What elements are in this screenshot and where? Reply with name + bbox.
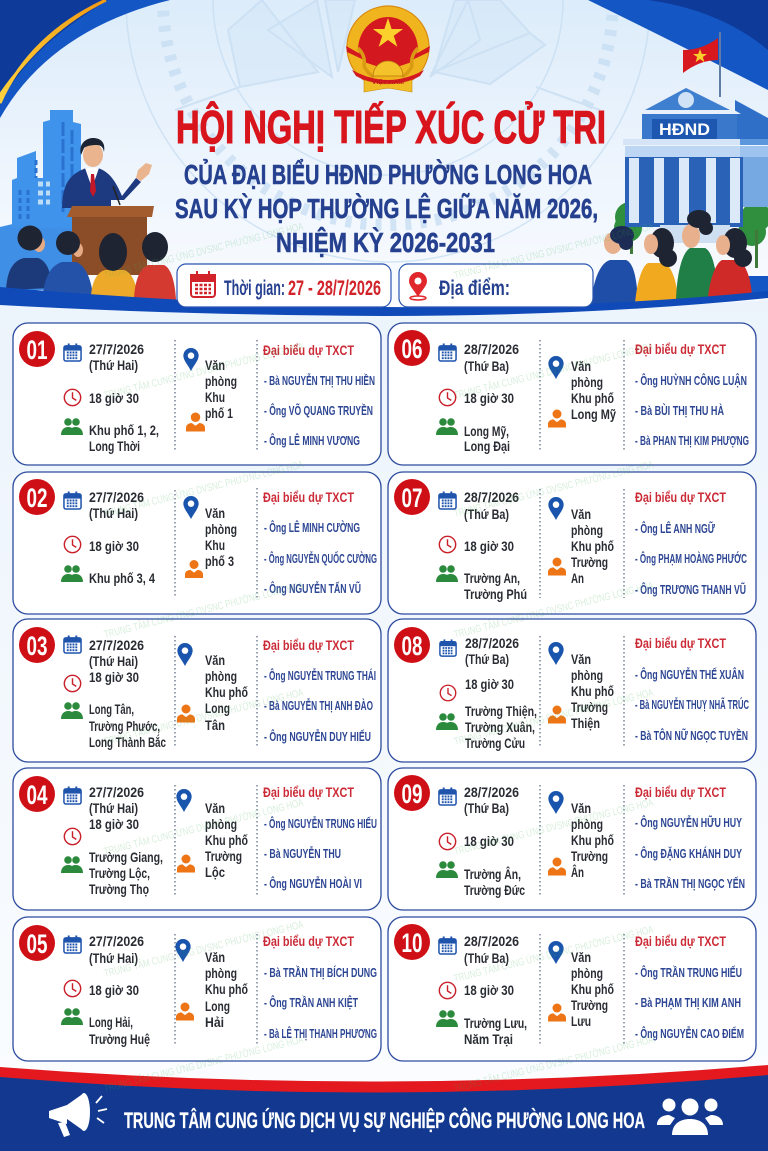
delegates — [635, 373, 749, 448]
number badge 06 — [394, 330, 430, 366]
area: Long Tân, — [89, 701, 134, 717]
venue: Văn — [571, 651, 591, 667]
date: (Thứ Ba) — [464, 800, 509, 816]
watermarks: TRUNG TÂM CUNG ỨNG DVSNC PHƯỜNG LONG HOA — [453, 686, 655, 748]
area: Long Mỹ, — [464, 423, 509, 439]
venue: Văn — [571, 800, 591, 816]
number badge 05 — [19, 925, 55, 961]
date: (Thứ Hai) — [89, 653, 138, 669]
area — [89, 849, 163, 897]
venue: phòng — [205, 373, 237, 389]
date: 27/7/2026 — [89, 489, 144, 505]
venue: phòng — [571, 374, 603, 390]
number badge 08: 08 — [402, 631, 422, 661]
delegates: - Ông VÕ QUANG TRUYỀN — [264, 403, 373, 418]
date: 27/7/2026 — [89, 637, 144, 653]
time value: 27 - 28/7/2026 — [288, 277, 381, 300]
area: Trường Lưu, — [464, 1015, 527, 1031]
icon: people — [61, 856, 83, 873]
number badge 10: 10 — [402, 928, 422, 958]
venue: Thiện — [571, 715, 600, 731]
icon: clock — [64, 389, 81, 406]
date: (Thứ Ba) — [464, 950, 509, 966]
date — [464, 933, 519, 966]
area: Trường Phú — [464, 586, 527, 602]
watermarks: TRUNG TÂM CUNG ỨNG DVSNC PHƯỜNG LONG HOA — [453, 579, 655, 641]
area: Trường Xuân, — [465, 719, 535, 735]
area: Long Thành Bắc — [89, 733, 166, 750]
venue: Lộc — [205, 864, 225, 880]
venue: phố 1 — [205, 405, 233, 421]
illustration: trees — [614, 202, 768, 268]
venue — [571, 506, 614, 586]
venue — [205, 357, 237, 421]
venue: Khu phố — [205, 684, 248, 700]
icon: people — [436, 565, 458, 582]
icon: clock — [64, 675, 81, 692]
delegates: - Bà NGUYỄN THU — [264, 846, 341, 861]
date: (Thứ Ba) — [464, 358, 509, 374]
icon: pin — [548, 356, 564, 379]
blue swoosh under header — [0, 287, 768, 316]
icon: pin — [548, 791, 564, 814]
date: (Thứ Hai) — [89, 357, 138, 373]
area — [464, 865, 525, 898]
icon: red pin — [409, 272, 427, 300]
icon: people — [436, 1010, 458, 1027]
watermarks: TRUNG TÂM CUNG ỨNG DVSNC PHƯỜNG LONG HOA — [453, 220, 655, 282]
card 04 — [13, 768, 381, 910]
venue: phòng — [571, 667, 603, 683]
illustration: HĐND building — [623, 82, 768, 243]
icon: clock — [64, 536, 81, 553]
watermarks — [103, 220, 655, 1095]
corner arcs and gold swoosh — [0, 0, 170, 118]
icon: people — [61, 565, 83, 582]
area: Trường Lộc, — [89, 865, 150, 881]
icon: people — [436, 418, 458, 435]
watermarks: TRUNG TÂM CUNG ỨNG DVSNC PHƯỜNG LONG HOA — [453, 340, 655, 402]
area: Trường Ân, — [464, 865, 521, 882]
icon: pin — [176, 789, 192, 812]
venue — [571, 651, 614, 731]
delegates — [264, 965, 377, 1041]
delegates: - Bà BÙI THỊ THU HÀ — [635, 403, 724, 418]
date — [89, 933, 144, 966]
card 02 — [13, 472, 381, 614]
date: 28/7/2026 — [464, 784, 519, 800]
venue: Khu phố — [205, 832, 248, 848]
icon: calendar — [440, 639, 456, 656]
number badge 01 — [19, 331, 55, 367]
date — [89, 784, 144, 816]
delegates: - Bà NGUYỄN THỊ ANH ĐÀO — [264, 698, 373, 713]
delegates — [264, 668, 376, 744]
delegates: - Ông LÊ MINH CƯỜNG — [264, 520, 360, 535]
area: Khu phố 3, 4 — [89, 570, 155, 586]
icon: person — [186, 412, 205, 432]
icon: clock — [439, 982, 456, 999]
area: Khu phố 1, 2, — [89, 422, 159, 438]
icon: calendar — [439, 936, 456, 954]
area: Trường Giang, — [89, 849, 163, 865]
delegates — [635, 667, 749, 743]
icon: person — [176, 1002, 194, 1020]
icon: clock — [64, 828, 81, 845]
delegates heading: Đại biểu dự TXCT — [635, 490, 727, 505]
card 08 — [388, 619, 756, 762]
watermarks: TRUNG TÂM CUNG ỨNG DVSNC PHƯỜNG LONG HOA — [453, 796, 655, 858]
delegates — [264, 520, 377, 596]
venue — [205, 505, 237, 569]
venue — [205, 949, 248, 1030]
icon: clock — [439, 536, 456, 553]
icon: pin — [183, 496, 199, 519]
venue: phòng — [205, 668, 237, 684]
subtitle line 2: SAU KỲ HỌP THƯỜNG LỆ GIỮA NĂM 2026, — [175, 193, 598, 224]
number badge 08 — [394, 627, 430, 663]
time: 18 giờ 30 — [464, 538, 514, 554]
area — [464, 423, 510, 454]
delegates — [635, 521, 747, 597]
icon: pin — [548, 497, 564, 520]
venue — [571, 358, 616, 422]
venue: Long Mỹ — [571, 406, 616, 422]
venue — [571, 800, 614, 880]
info box: place — [399, 264, 593, 307]
watermarks: TRUNG TÂM CUNG ỨNG DVSNC PHƯỜNG LONG HOA — [103, 1033, 305, 1095]
icon: calendar — [439, 343, 456, 361]
venue: Văn — [205, 505, 225, 521]
delegates heading: Đại biểu dự TXCT — [635, 636, 727, 651]
place text: Địa điểm: — [439, 277, 510, 300]
watermarks: TRUNG TÂM CUNG ỨNG DVSNC PHƯỜNG LONG HOA — [103, 340, 305, 402]
venue: Khu phố — [571, 683, 614, 699]
area — [464, 1015, 527, 1047]
icon: calendar — [439, 787, 456, 805]
card 06 — [388, 323, 756, 465]
icon: megaphone — [49, 1093, 107, 1137]
date: 28/7/2026 — [464, 489, 519, 505]
delegates: - Ông LÊ MINH VƯƠNG — [264, 433, 360, 448]
time: 18 giờ 30 — [89, 982, 139, 998]
icon: person — [548, 410, 566, 428]
number badge 02: 02 — [26, 483, 48, 513]
icon: person — [548, 706, 566, 724]
time: 18 giờ 30 — [465, 676, 514, 692]
number badge 04: 04 — [26, 780, 48, 810]
delegates: - Ông NGUYỄN HOÀI VI — [264, 876, 362, 891]
number badge 07 — [394, 479, 430, 515]
bronze drum pattern — [126, 0, 650, 262]
illustration: speaker at podium — [62, 138, 154, 275]
venue: phòng — [571, 816, 603, 832]
number badge 05: 05 — [26, 929, 48, 959]
venue: Khu phố — [571, 538, 614, 554]
venue: Trường — [571, 997, 608, 1013]
subtitle line 3: NHIỆM KỲ 2026-2031 — [276, 227, 495, 258]
date — [89, 341, 144, 373]
delegates heading: Đại biểu dự TXCT — [263, 343, 355, 358]
illustration: left audience — [6, 226, 176, 300]
footer band — [0, 1065, 768, 1151]
venue: Khu phố — [205, 981, 248, 997]
venue: Khu phố — [571, 981, 614, 997]
delegates — [264, 816, 377, 891]
watermarks: TRUNG TÂM CUNG ỨNG DVSNC PHƯỜNG LONG HOA — [453, 1033, 655, 1095]
area: Trường Huệ — [89, 1031, 150, 1047]
venue: phòng — [205, 965, 237, 981]
icon: calendar — [191, 271, 215, 297]
venue: phòng — [571, 965, 603, 981]
delegates: - Ông LÊ ANH NGỮ — [635, 521, 715, 536]
date — [464, 784, 519, 816]
icon: calendar — [64, 343, 81, 361]
venue: Ân — [571, 863, 584, 880]
card 07 — [388, 472, 756, 614]
watermarks: TRUNG TÂM CUNG ỨNG DVSNC PHƯỜNG LONG HOA — [103, 796, 305, 858]
icon: people — [436, 861, 458, 878]
number badge 09 — [394, 775, 430, 811]
delegates: - Ông NGUYỄN TRUNG HIẾU — [264, 816, 377, 831]
time: 18 giờ 30 — [89, 538, 139, 554]
illustration: flag on pole — [683, 32, 720, 97]
time text: Thời gian: — [224, 277, 285, 300]
venue: Văn — [205, 652, 225, 668]
venue: Văn — [205, 949, 225, 965]
icon: pin — [175, 939, 191, 962]
venue: Hải — [205, 1014, 224, 1030]
date: 27/7/2026 — [89, 341, 144, 357]
number badge 09: 09 — [402, 779, 422, 809]
icon: calendar — [64, 635, 81, 653]
venue: Long — [205, 998, 230, 1014]
delegates heading: Đại biểu dự TXCT — [635, 934, 727, 949]
icon: group of people — [657, 1098, 723, 1135]
time: 18 giờ 30 — [89, 669, 139, 685]
icon: calendar — [64, 786, 81, 804]
time: 18 giờ 30 — [89, 816, 139, 832]
time: 18 giờ 30 — [464, 390, 514, 406]
icon: clock — [439, 389, 456, 406]
area: Trường Đức — [464, 882, 525, 898]
illustration: city buildings — [0, 110, 81, 290]
venue: An — [571, 570, 584, 586]
icon: people — [61, 702, 83, 719]
icon: pin — [548, 941, 564, 964]
header banner — [0, 0, 768, 316]
date — [89, 489, 144, 521]
card 09 — [388, 768, 756, 910]
delegates: - Bà TRẦN THỊ BÍCH DUNG — [264, 965, 377, 980]
watermarks: TRUNG TÂM CUNG ỨNG DVSNC PHƯỜNG LONG HOA — [103, 458, 305, 520]
venue — [205, 800, 248, 880]
number badge 03: 03 — [26, 631, 48, 661]
area: Trường An, — [464, 570, 520, 586]
venue: Khu — [205, 537, 225, 553]
venue: phố 3 — [205, 553, 234, 569]
delegates — [264, 373, 375, 448]
delegates heading: Đại biểu dự TXCT — [263, 934, 355, 949]
delegates heading: Đại biểu dự TXCT — [263, 785, 355, 800]
venue: Trường — [205, 848, 242, 864]
area: Trường Thọ — [89, 881, 149, 897]
icon: national emblem — [346, 6, 430, 92]
number badge 10 — [394, 924, 430, 960]
area — [464, 570, 527, 602]
time: 18 giờ 30 — [464, 833, 514, 849]
title: HỘI NGHỊ TIẾP XÚC CỬ TRI — [176, 101, 606, 153]
delegates heading: Đại biểu dự TXCT — [263, 638, 355, 653]
date: 28/7/2026 — [464, 341, 519, 357]
area: Năm Trại — [464, 1031, 513, 1047]
venue — [571, 949, 614, 1029]
date: 27/7/2026 — [89, 784, 144, 800]
venue — [205, 652, 248, 733]
time: 18 giờ 30 — [89, 390, 139, 406]
venue: Văn — [571, 506, 591, 522]
icon: pin — [548, 642, 564, 665]
delegates heading: Đại biểu dự TXCT — [635, 342, 727, 357]
icon: pin — [183, 348, 199, 371]
area — [89, 701, 166, 750]
number badge 07: 07 — [402, 483, 422, 513]
venue: Trường — [571, 699, 608, 715]
delegates heading: Đại biểu dự TXCT — [263, 490, 355, 505]
delegates: - Ông NGUYỄN TRUNG THÁI — [264, 668, 376, 683]
delegates: - Ông TRẦN ANH KIỆT — [264, 995, 358, 1010]
icon: people — [61, 1008, 83, 1025]
icon: clock — [64, 980, 81, 997]
delegates heading: Đại biểu dự TXCT — [635, 785, 727, 800]
subtitle line 1: CỦA ĐẠI BIỂU HĐND PHƯỜNG LONG HOA — [184, 158, 592, 190]
date: 28/7/2026 — [464, 933, 519, 949]
area — [89, 422, 159, 454]
icon: person — [177, 704, 195, 722]
venue: Văn — [205, 800, 225, 816]
date — [89, 637, 144, 669]
date: (Thứ Ba) — [465, 651, 509, 667]
number badge 06: 06 — [402, 334, 422, 364]
delegates: - Bà NGUYỄN THỊ THU HIỀN — [264, 373, 375, 388]
delegates — [635, 965, 744, 1041]
date: (Thứ Ba) — [464, 506, 509, 522]
venue: phòng — [571, 522, 603, 538]
date — [464, 341, 519, 374]
delegates — [635, 815, 745, 891]
icon: national emblem: VIỆT NAM — [372, 78, 404, 86]
date: (Thứ Hai) — [89, 505, 138, 521]
icon: people — [436, 713, 458, 730]
area — [89, 1014, 150, 1047]
watermarks: TRUNG TÂM CUNG ỨNG DVSNC PHƯỜNG LONG HOA — [453, 458, 655, 520]
dome background — [0, 0, 768, 312]
venue: Tân — [205, 717, 225, 733]
date: (Thứ Hai) — [89, 950, 138, 966]
icon: calendar — [439, 491, 456, 509]
card 03 — [13, 619, 381, 762]
illustration: right audience — [591, 210, 768, 305]
watermarks: TRUNG TÂM CUNG ỨNG DVSNC PHƯỜNG LONG HOA — [103, 918, 305, 980]
delegates: - Ông NGUYỄN QUỐC CƯỜNG — [264, 551, 377, 566]
icon: clock — [440, 685, 456, 701]
venue: Văn — [571, 949, 591, 965]
icon: calendar — [64, 491, 81, 509]
area: Trường Thiện, — [465, 703, 537, 719]
venue: Trường — [571, 848, 608, 864]
card 01 — [13, 323, 381, 465]
venue: Trường — [571, 554, 608, 570]
delegates: - Ông NGUYỄN TẤN VŨ — [264, 581, 361, 596]
number badge 02 — [19, 479, 55, 515]
time: 18 giờ 30 — [464, 982, 514, 998]
number badge 03 — [19, 627, 55, 663]
venue: Long — [205, 700, 230, 716]
delegates: - Bà LÊ THỊ THANH PHƯƠNG — [264, 1026, 377, 1041]
venue: Khu phố — [571, 390, 614, 406]
venue: Văn — [205, 357, 225, 373]
card 10 — [388, 917, 756, 1061]
date — [465, 635, 519, 667]
venue: Lưu — [571, 1013, 591, 1029]
area — [465, 703, 537, 751]
date: 27/7/2026 — [89, 933, 144, 949]
icon: person — [548, 558, 566, 576]
delegates: - Ông NGUYỄN DUY HIẾU — [264, 729, 371, 744]
date — [464, 489, 519, 522]
area: Trường Cửu — [465, 735, 525, 751]
venue: Văn — [571, 358, 591, 374]
info box: time — [177, 264, 391, 307]
icon: person — [548, 858, 566, 876]
icon: person — [548, 1004, 566, 1022]
watermarks: TRUNG TÂM CUNG ỨNG DVSNC PHƯỜNG LONG HOA — [453, 923, 655, 985]
venue: Khu — [205, 389, 225, 405]
area: Long Hải, — [89, 1014, 133, 1030]
icon: calendar — [64, 935, 81, 953]
number badge 01: 01 — [26, 335, 48, 365]
card 05 — [13, 917, 381, 1061]
icon: person — [185, 560, 203, 578]
icon: clock — [439, 833, 456, 850]
watermarks: TRUNG TÂM CUNG ỨNG DVSNC PHƯỜNG LONG HOA — [103, 686, 305, 748]
icon: people — [61, 418, 83, 435]
venue: phòng — [205, 521, 237, 537]
watermarks: TRUNG TÂM CUNG ỨNG DVSNC PHƯỜNG LONG HOA — [103, 220, 305, 282]
venue: Khu phố — [571, 832, 614, 848]
number badge 04 — [19, 776, 55, 812]
illustration: HĐND building: HĐND — [659, 120, 710, 139]
icon: pin — [177, 643, 193, 666]
date: 28/7/2026 — [465, 635, 519, 651]
icon: person — [177, 854, 195, 872]
venue: phòng — [205, 816, 237, 832]
area: Trường Phước, — [89, 718, 160, 734]
watermarks: TRUNG TÂM CUNG ỨNG DVSNC PHƯỜNG LONG HOA — [103, 579, 305, 641]
date: (Thứ Hai) — [89, 800, 138, 816]
area: Long Đại — [464, 438, 510, 454]
area: Long Thời — [89, 438, 140, 454]
